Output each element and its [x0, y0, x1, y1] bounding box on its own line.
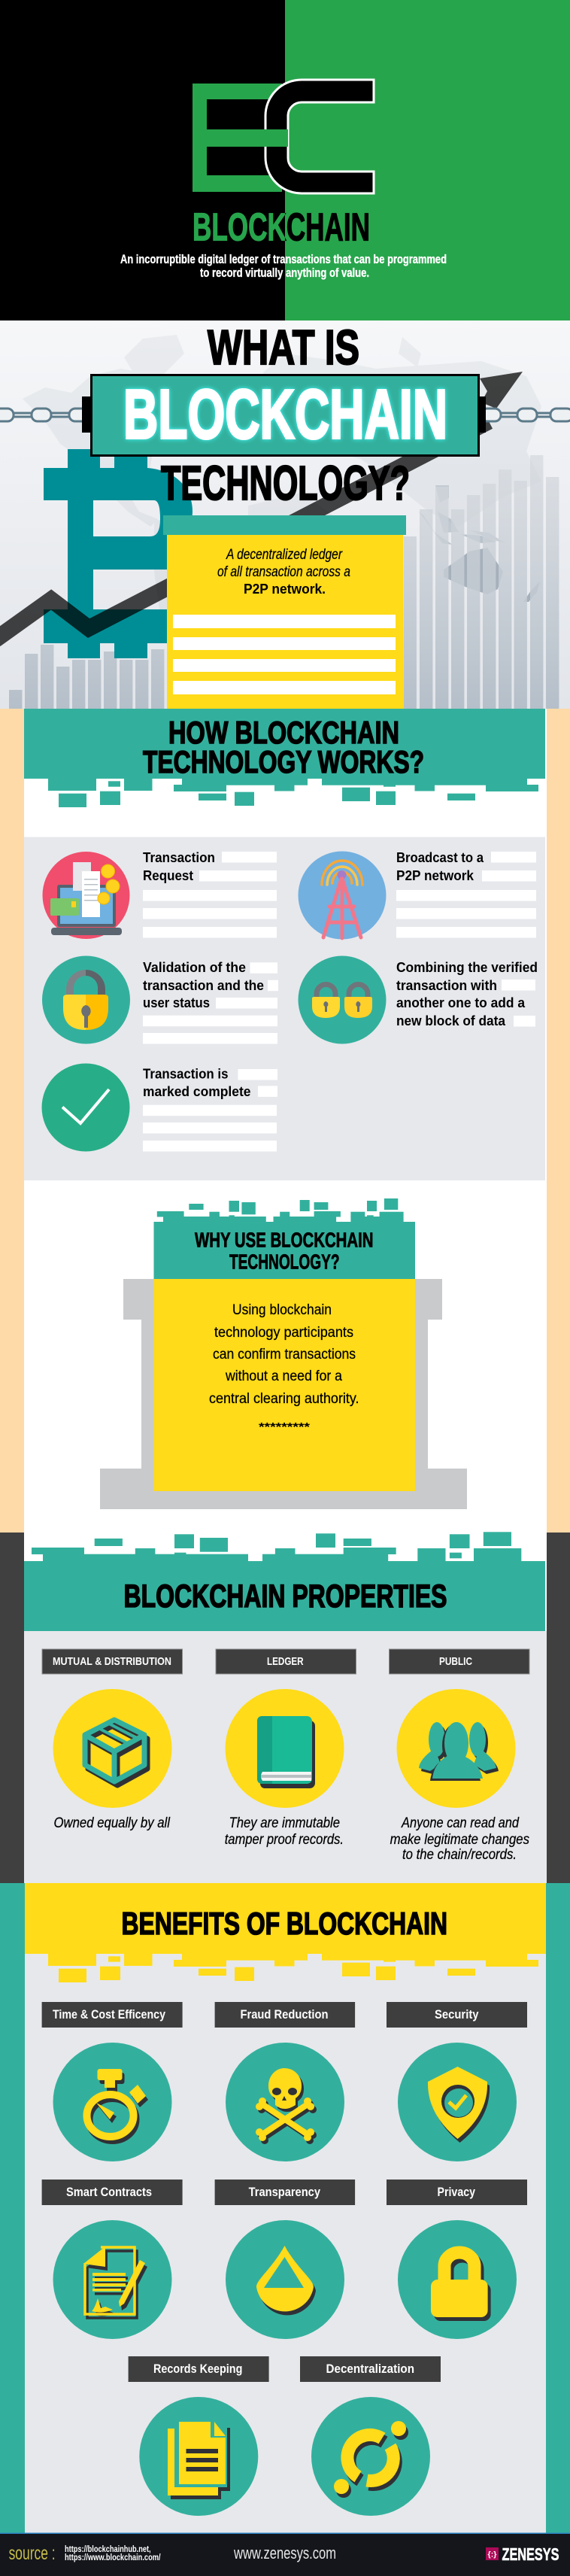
heading band: BENEFITS OF BLOCKCHAIN	[122, 1906, 447, 1941]
pixel border	[32, 1532, 521, 1561]
world map	[23, 335, 541, 624]
benefit: fraud reduction	[215, 2002, 355, 2161]
step: transaction request: Request	[143, 867, 193, 883]
step: validation: Validation of the	[143, 959, 246, 975]
source links: https://www.blockchain.com/	[65, 2552, 161, 2562]
benefit: privacy: Privacy	[438, 2185, 475, 2199]
benefit: privacy	[387, 2180, 527, 2339]
chain left	[0, 409, 89, 421]
property: public: make legitimate changes	[390, 1832, 529, 1848]
property: ledger: LEDGER	[267, 1655, 304, 1668]
title: technology: TECHNOLOGY?	[161, 456, 410, 510]
step: combining: transaction with	[396, 977, 497, 993]
pixel crown	[157, 1198, 404, 1223]
body card: can confirm transactions	[213, 1347, 356, 1362]
definition text: A decentralized ledger	[226, 547, 343, 563]
body card: without a need for a	[225, 1368, 342, 1384]
body card: *********	[259, 1421, 311, 1434]
benefit: decentralization: Decentralization	[326, 2362, 414, 2376]
icon: front person	[432, 1722, 483, 1779]
heading block: WHY USE BLOCKCHAIN	[195, 1228, 373, 1252]
heading band	[25, 1883, 546, 1982]
benefit: security: Security	[435, 2007, 479, 2022]
property: ledger: tamper proof records.	[225, 1832, 344, 1848]
source label: source :	[9, 2543, 56, 2564]
arrow: rising trend	[0, 372, 523, 639]
step: combining: another one to add a	[396, 995, 526, 1010]
chain right	[481, 409, 570, 421]
panel: blockchain properties	[0, 1532, 570, 1883]
body card: Using blockchain	[232, 1302, 332, 1318]
logo: zenesys: {:}	[487, 2550, 497, 2559]
step: complete: Transaction is	[143, 1065, 229, 1082]
icon: book	[257, 1716, 312, 1784]
icon: bitcoin symbol	[44, 449, 193, 658]
step: validation	[42, 955, 278, 1044]
logo word: BLOCKCHAIN: BLOCKCHAIN	[193, 206, 370, 250]
benefit: smart contracts: Smart Contracts	[66, 2185, 152, 2199]
panel: benefits of blockchain	[0, 1883, 570, 2533]
benefit: records keeping	[129, 2356, 269, 2516]
logo: zenesys	[486, 2544, 559, 2564]
body card: central clearing authority.	[209, 1391, 359, 1407]
step: broadcast: Broadcast to a	[396, 849, 484, 865]
icon: people	[419, 1722, 496, 1771]
icon: contract and pen	[83, 2246, 145, 2314]
icon: documents	[168, 2422, 227, 2496]
panel: why use blockchain	[100, 1198, 467, 1509]
hero subtitle	[120, 253, 447, 280]
definition text	[217, 547, 350, 597]
footer	[0, 2532, 570, 2576]
body card	[153, 1279, 415, 1491]
body card: technology participants	[214, 1325, 353, 1341]
icon: padlock	[42, 955, 130, 1044]
icon: checkmark	[42, 1064, 129, 1151]
benefit: records keeping: Records Keeping	[153, 2362, 242, 2376]
heading band: TECHNOLOGY WORKS?	[143, 744, 424, 779]
benefit: transparency	[215, 2180, 355, 2339]
icon: padlock	[431, 2252, 488, 2317]
logo word: BLOCKCHAIN	[194, 212, 368, 242]
icon: laptop with payment	[42, 852, 129, 939]
source links	[65, 2544, 161, 2562]
heading band	[24, 709, 545, 807]
icon: water drop	[256, 2246, 314, 2311]
source links: https://blockchainhub.net,	[65, 2544, 151, 2554]
icon: stopwatch	[87, 2069, 146, 2137]
icon: network ring	[334, 2421, 406, 2494]
step: combining	[298, 955, 538, 1044]
bar chart backdrop	[9, 455, 559, 709]
panel: how blockchain technology works	[0, 709, 570, 1561]
icon: box	[85, 1720, 144, 1782]
step: complete	[42, 1064, 277, 1151]
step: broadcast	[298, 849, 536, 939]
property: public: to the chain/records.	[402, 1847, 517, 1863]
property: mutual and distribution	[42, 1649, 182, 1831]
panel: what is blockchain technology	[0, 320, 570, 709]
step: validation: user status	[143, 995, 210, 1010]
definition text: of all transaction across a	[217, 564, 350, 580]
benefit: decentralization	[300, 2356, 441, 2516]
step: validation: transaction and the	[143, 977, 264, 993]
benefit: fraud reduction: Fraud Reduction	[241, 2007, 328, 2022]
heading block	[153, 1222, 415, 1279]
heading band: BLOCKCHAIN PROPERTIES	[123, 1578, 447, 1615]
icon: shield	[428, 2067, 487, 2139]
property: ledger: They are immutable	[229, 1815, 340, 1831]
step: combining: new block of data	[396, 1013, 506, 1028]
benefit: transparency: Transparency	[249, 2185, 320, 2199]
website: www.zenesys.com	[233, 2544, 336, 2562]
heading band: HOW BLOCKCHAIN	[168, 715, 399, 750]
benefit: time and cost efficiency	[42, 2002, 183, 2161]
definition text: P2P network.	[244, 581, 326, 597]
property: ledger	[216, 1649, 356, 1848]
step: broadcast: P2P network	[396, 867, 474, 883]
step: complete: marked complete	[143, 1083, 251, 1099]
title: what is: WHAT IS	[208, 320, 359, 375]
property: public: Anyone can read and	[401, 1815, 520, 1831]
benefit: time and cost efficiency: Time & Cost Efficency	[53, 2007, 165, 2022]
icon: two padlocks	[298, 955, 387, 1044]
placeholder bars	[173, 615, 396, 694]
icon: antenna tower	[298, 852, 387, 939]
benefit: smart contracts	[42, 2180, 183, 2339]
heading block: TECHNOLOGY?	[229, 1250, 340, 1273]
card: definition	[163, 515, 406, 709]
property: public: PUBLIC	[439, 1655, 472, 1668]
logo: EC monogram	[193, 80, 374, 193]
hero subtitle: to record virtually anything of value.	[200, 266, 369, 280]
heading band	[24, 1561, 545, 1631]
benefit: security	[387, 2002, 527, 2161]
step: combining: Combining the verified	[396, 959, 538, 975]
property: mutual and distribution: MUTUAL & DISTRIBUTION	[53, 1655, 171, 1668]
property: mutual and distribution: Owned equally by all	[54, 1815, 171, 1831]
icon: skull and crossbones	[256, 2068, 314, 2141]
step: transaction request: Transaction	[143, 849, 215, 865]
pillar backdrop	[100, 1279, 467, 1509]
panel: hero header	[0, 0, 570, 320]
logo word: BLOCKCHAIN: BLOCKCHAIN	[193, 206, 370, 250]
hero subtitle: An incorruptible digital ledger of transactions that can be programmed	[120, 253, 447, 266]
step: transaction request	[42, 849, 277, 939]
property: public	[390, 1649, 529, 1863]
